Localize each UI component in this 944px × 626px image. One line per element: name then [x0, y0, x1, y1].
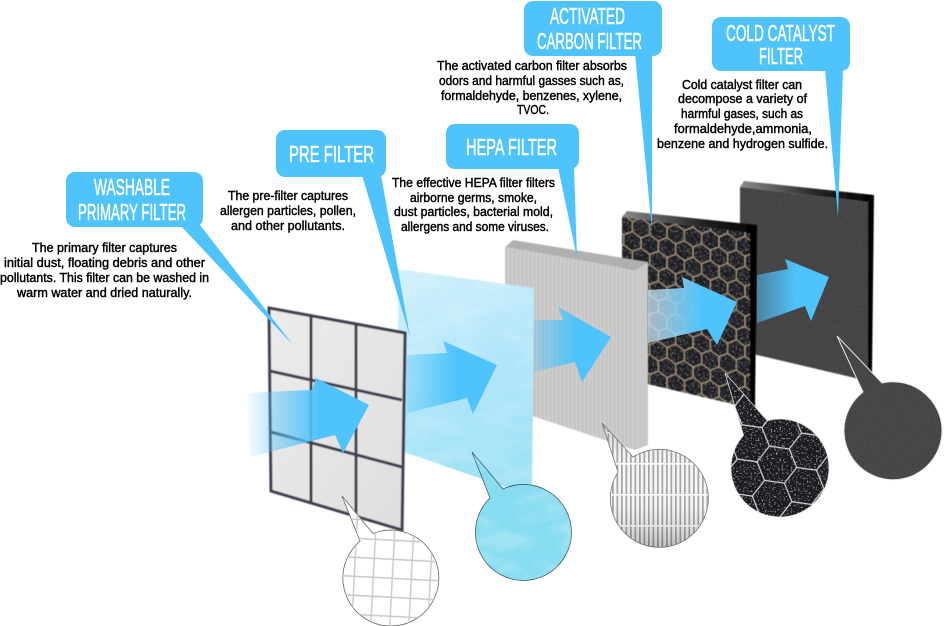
HEPA pleats [505, 247, 635, 450]
callout tail: carbon [635, 54, 652, 230]
description: cold catalyst filter: formaldehyde,ammonia, [674, 122, 812, 136]
label text: PRIMARY FILTER [78, 199, 186, 225]
description: activated carbon filter: formaldehyde, benzenes, xylene, [441, 89, 622, 103]
arrow: HEPA filter [534, 307, 611, 382]
callout tail: HEPA [558, 167, 577, 258]
label text [78, 174, 186, 225]
filter: cold catalyst [740, 181, 874, 381]
description: HEPA filter: dust particles, bacterial mold, [394, 205, 553, 219]
pre filter panel [398, 269, 534, 496]
label pill [446, 124, 579, 169]
label: HEPA filter [446, 124, 579, 169]
label text: ACTIVATED [550, 3, 625, 29]
filter frame [269, 308, 405, 530]
filter panes [268, 307, 406, 531]
pre fibre texture [472, 452, 571, 580]
description: primary filter: The primary filter captures [32, 241, 177, 255]
filter: activated carbon [622, 211, 757, 408]
arrow: primary filter [247, 378, 369, 457]
description: activated carbon filter: TVOC. [517, 103, 549, 117]
description: primary filter: initial dust, floating debris and other [4, 256, 205, 270]
callout tail: pre filter [362, 175, 410, 337]
label: washable primary filter [66, 172, 203, 227]
arrow: cold catalyst filter [757, 259, 829, 323]
description: HEPA filter: allergens and some viruses. [401, 220, 549, 234]
magnifier: cold catalyst foam [837, 336, 942, 480]
description: primary filter: warm water and dried naturally. [16, 286, 192, 300]
magnifier: pre filter fibre [472, 452, 571, 580]
description: activated carbon filter [437, 59, 627, 117]
pre magnifier bubble [472, 452, 571, 580]
top edge of cold catalyst filter [740, 181, 874, 202]
description: HEPA filter [392, 176, 555, 234]
right edge of carbon filter [740, 225, 757, 408]
label text [726, 20, 835, 69]
mottled fibre [398, 269, 534, 496]
callout tail: washable primary [180, 225, 293, 345]
primary magnifier bubble [342, 496, 439, 626]
label text: FILTER [759, 43, 803, 69]
arrow: carbon filter [648, 277, 737, 345]
label text [537, 3, 642, 54]
filter: HEPA [505, 240, 648, 450]
cold catalyst magnifier texture [837, 336, 942, 480]
cold catalyst filter face [740, 187, 868, 381]
filter: pre filter [398, 269, 534, 496]
top edge of carbon filter [622, 211, 757, 233]
callout tail: cold catalyst [825, 69, 843, 217]
label pill [712, 17, 850, 71]
HEPA filter face [505, 247, 635, 450]
description: cold catalyst filter: Cold catalyst filter can [682, 78, 802, 92]
description: pre filter [220, 189, 356, 233]
label text: WASHABLE [94, 174, 170, 200]
cold catalyst magnifier bubble [837, 336, 942, 480]
description: pre filter: The pre-filter captures [228, 189, 348, 203]
top edge of HEPA filter [505, 240, 648, 270]
carbon magnifier bubble [725, 373, 829, 517]
magnifier: carbon granules [725, 373, 829, 517]
description: cold catalyst filter: harmful gases, such as [681, 107, 803, 121]
arrow: pre filter [407, 341, 497, 414]
label pill [524, 1, 662, 56]
carbon granules [622, 217, 750, 408]
HEPA magnifier shading [602, 423, 708, 547]
label: cold catalyst filter [712, 17, 850, 71]
label: pre filter [276, 130, 386, 177]
label text: HEPA FILTER [466, 134, 557, 160]
carbon magnifier mesh [725, 373, 829, 517]
pre filter ribs [398, 269, 534, 496]
right edge of cold catalyst filter [868, 195, 874, 381]
label pill [66, 172, 203, 227]
description: HEPA filter: The effective HEPA filter filters [392, 176, 555, 190]
label pill [276, 130, 386, 177]
description: pre filter: allergen particles, pollen, [220, 204, 356, 218]
description: pre filter: and other pollutants. [231, 219, 345, 233]
right edge of HEPA filter [635, 262, 648, 450]
HEPA magnifier bubble [602, 423, 708, 547]
magnifier: HEPA pleats [602, 423, 708, 547]
label text: PRE FILTER [289, 141, 374, 167]
label text: CARBON FILTER [537, 28, 642, 54]
foam texture [740, 187, 868, 381]
label text: COLD CATALYST [726, 20, 835, 46]
carbon magnifier granules [725, 373, 829, 517]
description: activated carbon filter: odors and harmful gasses such as, [439, 74, 624, 88]
hexagon mesh [622, 217, 750, 408]
filter: washable primary [268, 307, 406, 531]
label: activated carbon filter [524, 1, 662, 56]
description: activated carbon filter: The activated carbon filter absorbs [437, 59, 627, 73]
description: HEPA filter: airborne germs, smoke, [410, 191, 537, 205]
description: cold catalyst filter [657, 78, 828, 151]
primary mesh texture [342, 496, 439, 626]
description: primary filter: pollutants. This filter can be washed in [0, 271, 209, 285]
magnifier: primary filter mesh [342, 496, 439, 626]
description: cold catalyst filter: benzene and hydrogen sulfide. [657, 137, 828, 151]
description: cold catalyst filter: decompose a variety of [678, 92, 808, 106]
carbon filter face [622, 217, 750, 408]
description: primary filter [0, 241, 209, 300]
